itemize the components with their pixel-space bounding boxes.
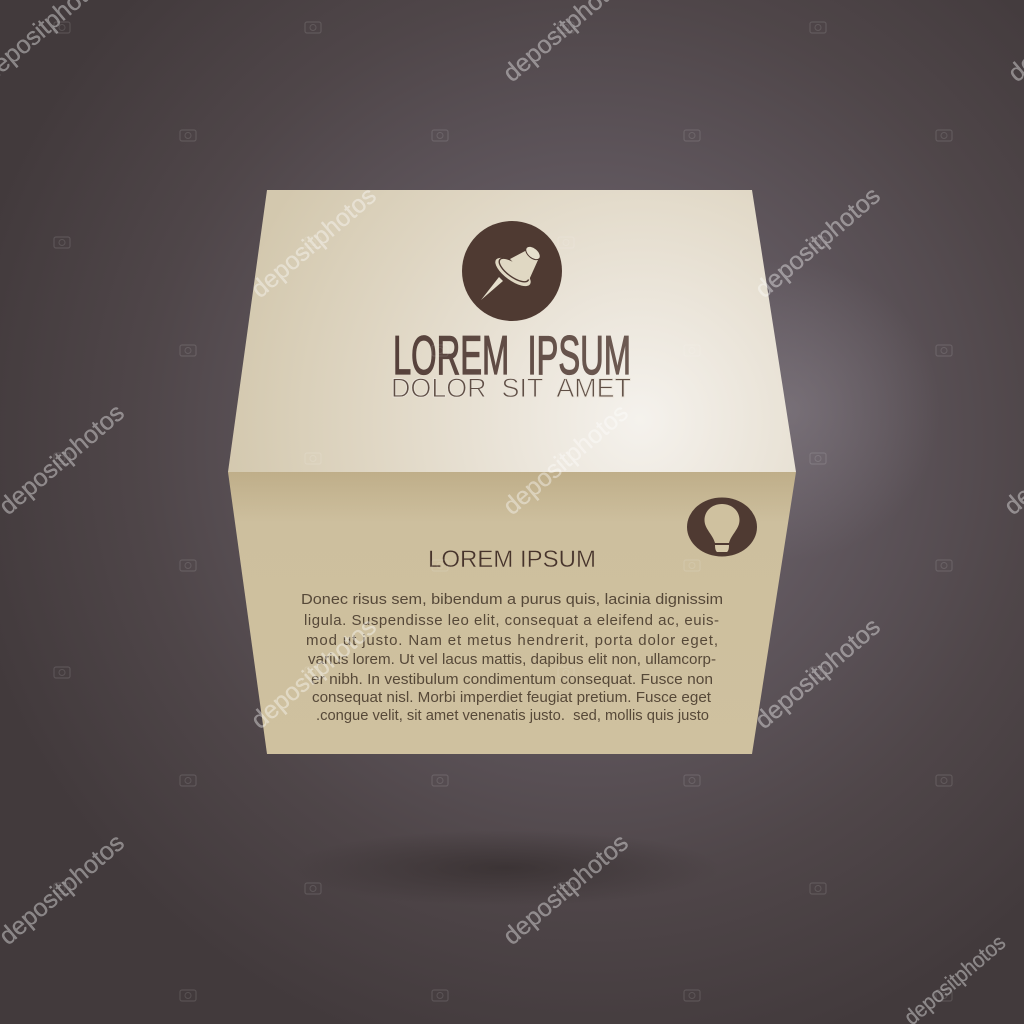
icon: push pin	[462, 221, 562, 321]
text block: body: Donec risus sem, bibendum a purus quis, lacinia dignissim	[301, 591, 723, 608]
subtitle: DOLOR SIT AMET	[391, 373, 631, 403]
watermark: text: depositphotos	[246, 182, 382, 304]
text block: body: er nibh. In vestibulum condimentum consequat. Fusce non	[311, 671, 713, 688]
watermark: text: depositphotos	[498, 399, 634, 521]
text block: body: .congue velit, sit amet venenatis justo. sed, mollis quis justo	[316, 707, 709, 724]
text block: body: ligula. Suspendisse leo elit, consequat a eleifend ac, euis-	[304, 612, 719, 629]
panel: top face	[228, 190, 796, 472]
text block: body: consequat nisl. Morbi imperdiet feugiat pretium. Fusce eget	[312, 689, 712, 706]
watermark: text: depositphotos	[750, 182, 886, 304]
floor shadow	[290, 830, 720, 906]
panel: front face	[228, 472, 796, 754]
title	[391, 324, 631, 403]
watermark: text: depositphotos	[498, 829, 634, 951]
watermark: text: depositphotos	[246, 613, 382, 735]
title: LOREM IPSUM	[393, 324, 631, 386]
heading: front face: LOREM IPSUM	[428, 546, 596, 573]
text block: body	[301, 591, 723, 724]
text block: body: mod ut justo. Nam et metus hendrerit, porta dolor eget,	[306, 632, 718, 649]
box	[228, 190, 796, 754]
icon: light bulb	[687, 498, 757, 556]
watermark: text: depositphotos	[750, 613, 886, 735]
text block: body: varius lorem. Ut vel lacus mattis, dapibus elit non, ullamcorp-	[308, 651, 716, 668]
